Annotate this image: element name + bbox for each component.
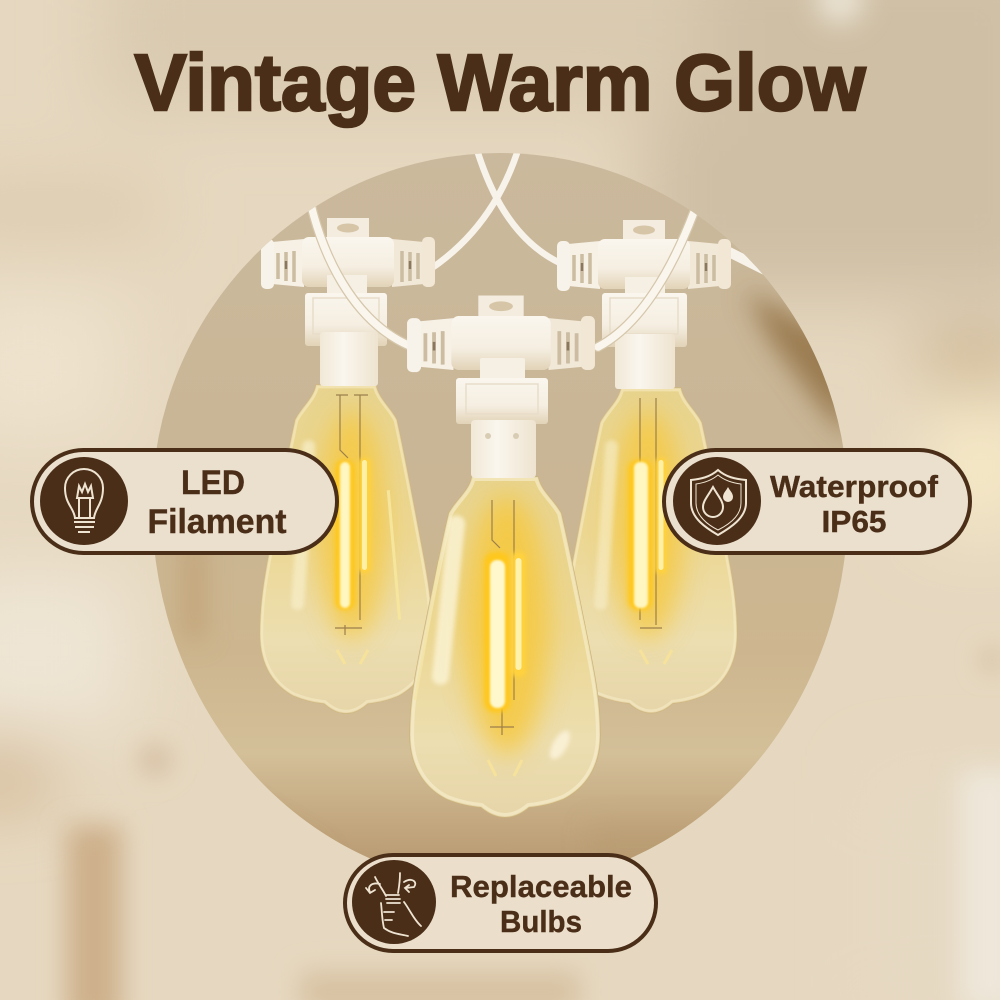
callout: LED Filament: Filament bbox=[148, 503, 286, 541]
callout: Waterproof IP65 bbox=[664, 450, 970, 553]
label: Replaceable bbox=[450, 869, 632, 904]
callout: Replaceable Bulbs: Bulbs bbox=[500, 904, 582, 939]
callout: LED Filament bbox=[32, 450, 337, 553]
crossing cables bbox=[432, 150, 765, 270]
soft shadows on disc bbox=[160, 290, 850, 865]
icon: shield with water drops bbox=[673, 457, 761, 545]
centre connector bbox=[407, 295, 595, 478]
icon: light bulb bbox=[40, 457, 128, 545]
circular photo panel: string lights bbox=[152, 150, 850, 886]
right bulb bbox=[565, 388, 737, 713]
left connector bbox=[261, 218, 435, 386]
right connector bbox=[557, 220, 731, 389]
callout: Waterproof IP65: IP65 bbox=[822, 504, 886, 539]
label: LED bbox=[181, 464, 245, 502]
disc backdrop bbox=[152, 153, 848, 886]
icon: hand twisting bulb bbox=[352, 860, 436, 944]
title: Vintage Warm Glow bbox=[134, 38, 866, 127]
centre bulb bbox=[410, 477, 600, 817]
left bulb bbox=[260, 385, 432, 713]
callout: Replaceable Bulbs bbox=[345, 855, 656, 951]
cables in front of side lamps bbox=[311, 205, 694, 347]
label: Waterproof bbox=[770, 469, 939, 504]
